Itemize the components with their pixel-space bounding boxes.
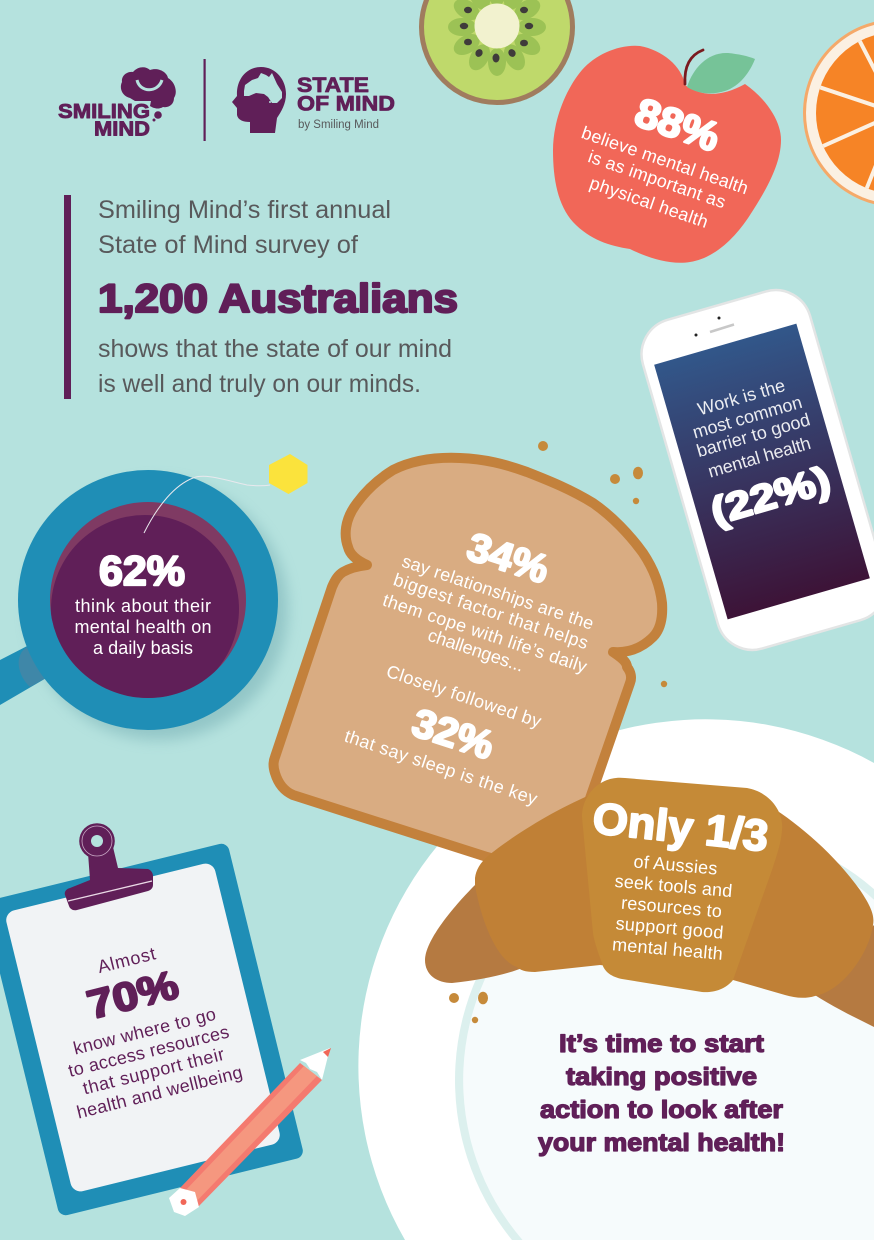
caption: phone stat: mental health (706, 433, 813, 482)
caption: magnifier stat: mental health on (74, 617, 212, 637)
logo: Smiling Mind: SMILING (58, 100, 150, 123)
stat: 32%: 32% (407, 701, 499, 768)
icon: clipboard (0, 823, 305, 1217)
icon: magnifier (0, 470, 288, 740)
icon: croissant (425, 778, 874, 1027)
stat: 34%: 34% (462, 525, 554, 592)
caption: relationships: Closely followed by (384, 661, 544, 731)
stat: Only 1/3: Only 1/3 (590, 794, 771, 861)
logo: State of Mind: OF MIND (297, 92, 395, 116)
caption: clipboard stat: health and wellbeing (75, 1062, 244, 1122)
icon: pencil (169, 1048, 331, 1216)
icon: crumbs (449, 441, 667, 1023)
caption: apple stat: physical health (587, 173, 711, 232)
logo: State of Mind: by Smiling Mind (298, 119, 379, 131)
caption: phone stat: barrier to good (694, 409, 812, 461)
panel: phone stat (633, 282, 874, 658)
intro text block (64, 195, 458, 399)
logo: Smiling Mind (58, 67, 176, 140)
caption: sleep: that say sleep is the key (342, 726, 540, 809)
icon: bread slice (274, 458, 662, 880)
call to action (538, 1030, 785, 1157)
icon: orange slice (803, 19, 874, 207)
caption: croissant stat: seek tools and (614, 871, 733, 901)
caption: relationships: them cope with life’s daily (380, 590, 590, 677)
caption: croissant stat: support good (615, 913, 724, 943)
panel: apple stat (553, 46, 781, 263)
caption: apple stat: believe mental health (579, 122, 751, 198)
caption: croissant stat (611, 851, 733, 964)
stat: 88%: 88% (629, 89, 726, 161)
call to action: taking positive (566, 1063, 757, 1091)
logo: State of Mind (232, 67, 395, 133)
call to action: your mental health! (538, 1129, 785, 1157)
intro text block: shows that the state of our mind (98, 335, 452, 363)
caption: croissant stat: of Aussies (633, 851, 718, 879)
plate (358, 719, 874, 1240)
caption: relationships: say relationships are the (399, 551, 596, 634)
caption: clipboard stat (68, 1011, 242, 1118)
stat: 22%: (22%) (706, 459, 835, 534)
panel: croissant stat (425, 778, 874, 1027)
icon: hexagon tag (144, 454, 308, 533)
caption: phone stat: most common (690, 392, 804, 443)
caption: clipboard stat: to access resources (66, 1022, 231, 1081)
caption: clipboard stat: know where to go (71, 1004, 218, 1059)
caption: relationships: challenges... (425, 625, 526, 676)
icon: phone (633, 282, 874, 658)
stat: 70%: 70% (83, 963, 183, 1028)
stat: 62%: 62% (99, 547, 185, 594)
caption: magnifier stat: a daily basis (93, 638, 193, 658)
caption: magnifier stat (74, 596, 212, 658)
caption: relationships: biggest factor that helps (391, 569, 591, 653)
caption: apple stat: is as important as (586, 146, 728, 212)
call to action: action to look after (540, 1096, 783, 1124)
panel: bread stat (274, 458, 662, 880)
caption: relationships (380, 551, 596, 731)
intro text block: is well and truly on our minds. (98, 370, 421, 398)
headline: 1,200 Australians: 1,200 Australians (98, 277, 458, 321)
call to action: It’s time to start (559, 1030, 765, 1058)
caption: phone stat (693, 382, 811, 478)
caption: clipboard stat: that support their (81, 1044, 226, 1098)
caption: almost: Almost (96, 943, 158, 977)
icon: kiwi (419, 0, 575, 105)
caption: croissant stat: resources to (620, 893, 723, 921)
intro text block: Smiling Mind’s first annual (98, 196, 391, 224)
icon: apple (553, 46, 781, 263)
intro text block: State of Mind survey of (98, 231, 358, 259)
caption: magnifier stat: think about their (75, 596, 211, 616)
logo: Smiling Mind: MIND (94, 118, 150, 140)
panel: magnifier stat (0, 454, 308, 740)
caption: apple stat (579, 122, 751, 232)
logos (58, 59, 395, 141)
panel: clipboard stat (0, 823, 331, 1217)
caption: croissant stat: mental health (611, 934, 724, 964)
logo: State of Mind: STATE (297, 73, 369, 97)
caption: phone stat: Work is the (695, 375, 787, 419)
